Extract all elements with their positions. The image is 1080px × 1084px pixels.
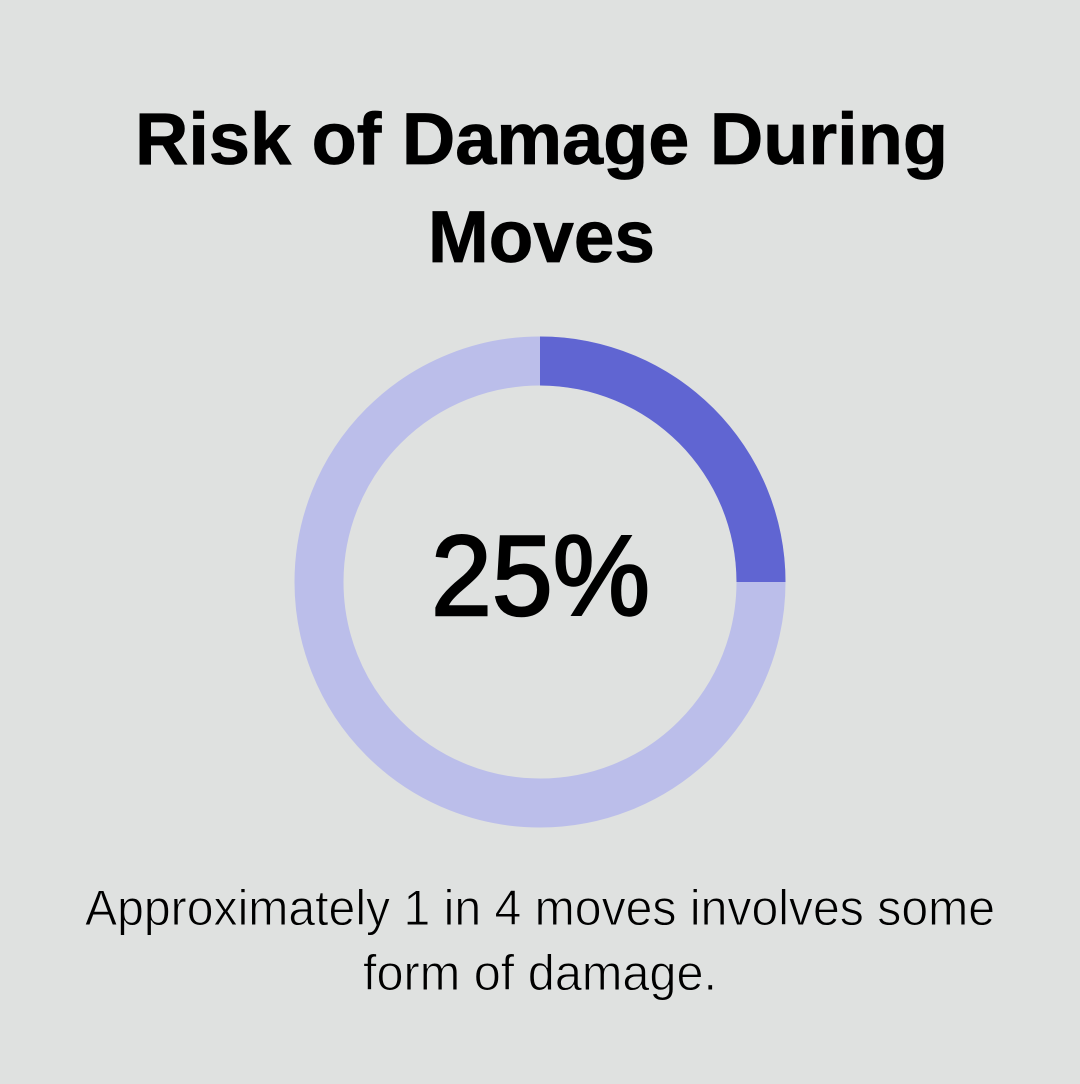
center value: 25% bbox=[431, 513, 650, 640]
title: Moves bbox=[428, 197, 655, 278]
donut chart: 25% bbox=[319, 336, 786, 803]
description: form of damage. bbox=[363, 945, 717, 1001]
title: Risk of Damage During bbox=[135, 99, 948, 180]
description bbox=[85, 880, 995, 1001]
donut track: remaining 75% bbox=[319, 361, 761, 803]
title bbox=[135, 99, 948, 278]
description: Approximately 1 in 4 moves involves some bbox=[85, 880, 995, 936]
donut segment: 25% bbox=[540, 336, 786, 582]
